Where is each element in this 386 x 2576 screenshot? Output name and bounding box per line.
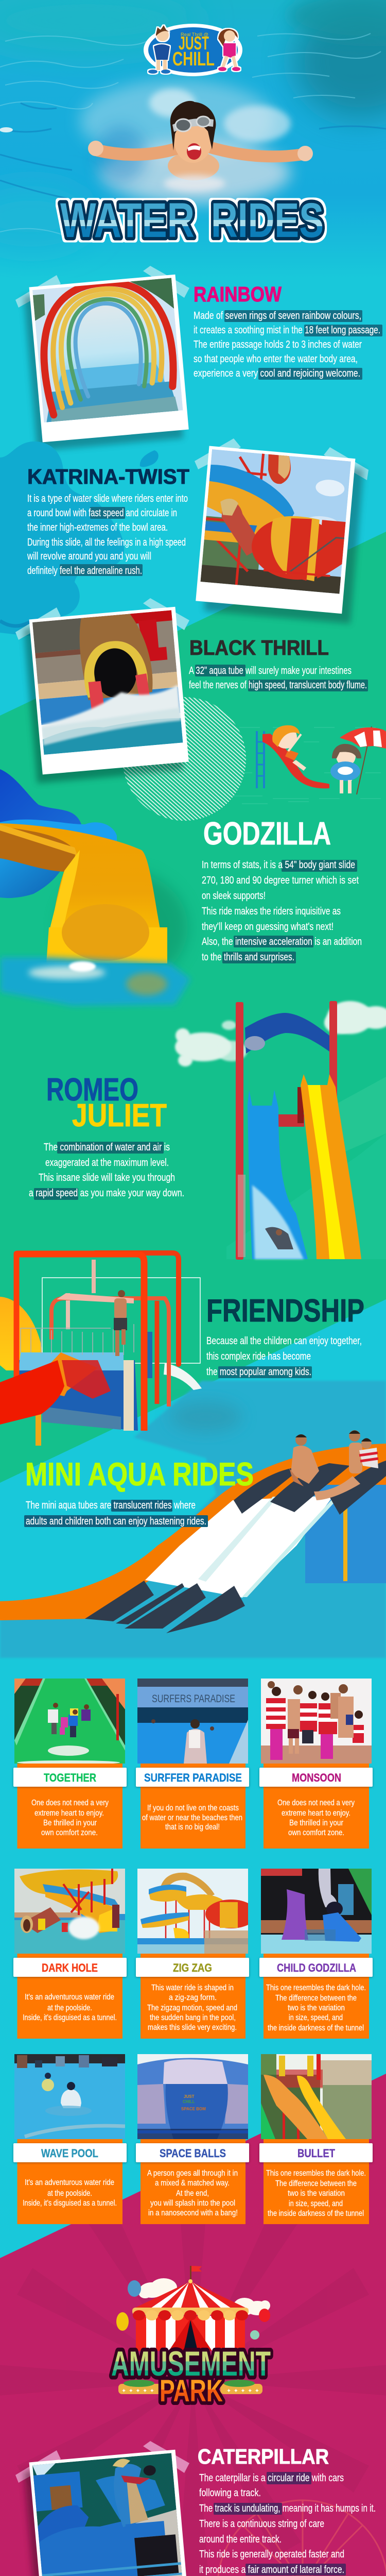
mini aqua rides text block xyxy=(24,1456,254,1527)
heading: black thrill: BLACK THRILL xyxy=(189,636,329,659)
balloons xyxy=(116,2280,270,2340)
card: together: One does not need a very xyxy=(31,1799,109,1807)
katrina twist text block: definitely feel the adrenaline rush. xyxy=(27,565,142,577)
katrina twist text block xyxy=(27,465,189,577)
caterpillar text block: There is a continuous string of care xyxy=(199,2518,324,2530)
tent flag xyxy=(190,2266,202,2281)
logo wordmark: Real Thrill @ xyxy=(181,32,208,37)
godzilla text block xyxy=(202,816,362,963)
card: child godzilla: CHILD GODZILLA xyxy=(277,1961,356,1974)
card: together: own comfort zone. xyxy=(41,1828,98,1837)
card: monsoon: Be thrilled in your xyxy=(289,1819,344,1827)
card: wave pool xyxy=(13,2054,127,2224)
card: child godzilla xyxy=(259,1869,373,2039)
card: space balls: SPACE BOM xyxy=(181,2107,206,2111)
katrina twist text block: a round bowl with fast speed and circulate in xyxy=(27,507,177,519)
card: space balls: in a nanosecond with a bang! xyxy=(148,2209,238,2217)
tent body xyxy=(136,2316,245,2351)
mini aqua rides text block: adults and children both can enjoy hastening rides. xyxy=(26,1516,206,1527)
caterpillar text block: following a track. xyxy=(199,2487,261,2499)
caterpillar text block: This ride is generally operated faster and xyxy=(199,2549,344,2560)
card: together: extreme heart to enjoy. xyxy=(34,1809,104,1818)
card: child godzilla: the inside darkness of the tunnel xyxy=(268,2024,364,2032)
polaroid: black thrill xyxy=(15,598,189,783)
katrina twist text block: will revolve around you and you will xyxy=(27,551,151,562)
romeo juliet text block xyxy=(29,1072,184,1200)
godzilla text block: This ride makes the riders inquisitive as xyxy=(202,906,341,917)
boy swimmer xyxy=(88,101,313,192)
card: monsoon xyxy=(259,1679,373,1849)
card: zig zag: ZIG ZAG xyxy=(173,1961,212,1974)
heading: katrina twist: KATRINA-TWIST xyxy=(27,465,189,488)
card: monsoon: extreme heart to enjoy. xyxy=(282,1809,350,1818)
hero pool photo xyxy=(0,0,386,278)
card: dark hole: DARK HOLE xyxy=(42,1961,98,1974)
card: dark hole: It's an adventurous water ride xyxy=(25,1993,114,2002)
card: child godzilla: two is the variation xyxy=(288,2004,345,2012)
black thrill text block xyxy=(189,636,368,691)
upper fins xyxy=(234,1461,386,1515)
friendship text block xyxy=(206,1293,364,1378)
card: together: Be thrilled in your xyxy=(43,1819,97,1827)
card: space balls xyxy=(136,2054,249,2224)
white slides xyxy=(145,1496,334,1598)
awning xyxy=(132,2308,249,2320)
card: dark hole: at the poolside. xyxy=(47,2004,92,2012)
caterpillar text block: The caterpillar is a circular ride with cars xyxy=(199,2472,344,2484)
splash blob behind Katrina text xyxy=(0,442,159,636)
card: surffer paradise: SURFFER PARADISE xyxy=(144,1771,242,1784)
romeo juliet text block: This insane slide will take you through xyxy=(39,1172,175,1183)
caterpillar text block xyxy=(198,2445,376,2575)
card: bullet: BULLET xyxy=(297,2147,335,2160)
friendship text block: this complex ride has become xyxy=(206,1351,311,1362)
illustration: kids on slide with umbrella xyxy=(232,725,386,804)
logo wordmark: JUST xyxy=(179,32,209,54)
card: monsoon: MONSOON xyxy=(292,1771,341,1784)
title: Water Rides xyxy=(60,193,324,248)
mascot boy xyxy=(148,25,170,74)
card: bullet: the inside darkness of the tunnel xyxy=(268,2209,364,2218)
mini aqua slide photo xyxy=(0,1430,386,1633)
romeo juliet text block: exaggerated at the maximum level. xyxy=(45,1157,169,1168)
card: zig zag xyxy=(136,1869,257,2039)
romeo juliet slides photo xyxy=(175,1001,386,1260)
card: dark hole xyxy=(13,1869,127,2039)
godzilla text block: they'll keep on guessing what's next! xyxy=(202,921,334,933)
red slide xyxy=(0,1352,111,1425)
card: surffer paradise: that is no big deal! xyxy=(165,1823,220,1832)
card: wave pool: at the poolside. xyxy=(47,2189,92,2198)
godzilla text block: on sleek supports! xyxy=(202,890,266,902)
polaroid: caterpillar xyxy=(15,2441,189,2576)
card: surffer paradise: of water or near the beaches then xyxy=(142,1814,242,1822)
card: monsoon: One does not need a very xyxy=(277,1799,355,1807)
card: surffer paradise: If you do not live on the coasts xyxy=(147,1804,239,1812)
lower fins xyxy=(85,1581,245,1633)
heading: caterpillar: CATERPILLAR xyxy=(198,2445,329,2468)
card: wave pool: WAVE POOL xyxy=(41,2147,98,2160)
card: space balls: CHILL xyxy=(183,2099,195,2104)
romeo juliet text block: The combination of water and air is xyxy=(44,1142,170,1153)
clouds xyxy=(139,2278,270,2315)
katrina twist text block: the inner high-extremes of the bowl area. xyxy=(27,522,168,533)
card: wave pool: Inside, it's disguised as a tunnel. xyxy=(23,2199,117,2208)
card: space balls: you will splash into the pool xyxy=(150,2199,235,2208)
amusement park logo xyxy=(111,2266,271,2408)
caterpillar text block: it produces a fair amount of lateral force. xyxy=(199,2564,344,2575)
side banners: ✦✦✦✦✦ xyxy=(226,2387,259,2394)
wordmark: amusement: AMUSEMENT xyxy=(111,2344,271,2383)
heading: juliet: JULIET xyxy=(72,1098,167,1133)
heading: godzilla: GODZILLA xyxy=(203,816,331,852)
polaroid: rainbow xyxy=(15,266,189,451)
card: zig zag: a zig-zag form. xyxy=(169,1993,217,2002)
rainbow text block xyxy=(194,282,382,380)
katrina twist text block: During this slide, all the feelings in a high speed xyxy=(27,537,186,548)
card: space balls: a mixed & matched way. xyxy=(155,2179,230,2188)
wordmark: park: PARK xyxy=(160,2374,223,2408)
person xyxy=(114,1290,127,1356)
red slide xyxy=(262,734,329,788)
mini aqua rides text block: The mini aqua tubes are translucent rides where xyxy=(26,1500,196,1511)
side banners: ✦✦✦✦✦ xyxy=(121,2387,154,2394)
side banners xyxy=(118,2380,262,2394)
clouds xyxy=(175,1001,386,1066)
card: child godzilla: The difference between the xyxy=(275,1994,357,2003)
umbrella xyxy=(340,726,386,794)
girl on slide xyxy=(272,725,306,771)
friendship text block: the most popular among kids. xyxy=(206,1366,311,1378)
card: child godzilla: in size, speed, and xyxy=(289,2013,343,2022)
card: monsoon: own comfort zone. xyxy=(288,1828,344,1837)
godzilla slide photo xyxy=(0,769,190,1006)
card: bullet: The difference between the xyxy=(275,2179,357,2188)
title: Water Rides: WATER xyxy=(60,193,195,248)
child with float xyxy=(330,744,361,793)
card: wave pool: It's an adventurous water ride xyxy=(25,2178,114,2187)
friendship slide photo xyxy=(0,1253,202,1446)
godzilla text block: to the thrills and surprises. xyxy=(202,952,294,963)
heading: rainbow: RAINBOW xyxy=(194,282,282,306)
card: bullet: in size, speed, and xyxy=(289,2199,343,2208)
faint ferris wheel xyxy=(218,2500,386,2576)
card: space balls: A person goes all through it in xyxy=(147,2169,238,2178)
card: zig zag: makes this slide very exciting. xyxy=(148,2023,237,2032)
heading: mini aqua rides: MINI AQUA RIDES xyxy=(25,1456,254,1493)
ladder xyxy=(257,731,264,788)
title: Water Rides: RIDES xyxy=(211,193,324,248)
caterpillar text block: around the entire track. xyxy=(199,2534,282,2545)
card: zig zag: The zigzag motion, speed and xyxy=(147,2004,237,2012)
card: zig zag: This water ride is shaped in xyxy=(151,1984,234,1992)
romeo juliet text block: a rapid speed as you make your way down. xyxy=(29,1188,184,1199)
friendship water and yellow circle xyxy=(0,1297,386,1658)
card: space balls: At the end, xyxy=(176,2189,209,2198)
card: together xyxy=(13,1679,127,1849)
card: space balls: JUST xyxy=(184,2094,195,2099)
card: zig zag: the sudden bang in the pool, xyxy=(150,2013,236,2022)
card: bullet: two is the variation xyxy=(288,2189,345,2198)
mascot girl xyxy=(218,29,240,71)
kids xyxy=(289,1430,378,1500)
polaroid: katrina twist xyxy=(195,438,369,624)
card: together: TOGETHER xyxy=(44,1771,96,1784)
tent roof xyxy=(132,2279,249,2309)
logo wordmark: CHILL xyxy=(172,48,215,70)
hatched circle xyxy=(122,697,246,821)
katrina twist text block: It is a type of water slide where riders enter into xyxy=(27,493,188,504)
white frame xyxy=(42,1278,200,1363)
water at slide foot xyxy=(0,957,190,1006)
card: dark hole: Inside, it's disguised as a tunnel. xyxy=(23,2013,117,2022)
heading: romeo: ROMEO xyxy=(46,1072,138,1108)
card: bullet xyxy=(259,2054,373,2224)
card: surffer paradise xyxy=(136,1679,249,1849)
card: space balls: SPACE BALLS xyxy=(160,2147,226,2160)
platform xyxy=(17,1324,152,1431)
logo: Just Chill xyxy=(144,24,242,76)
logo wordmark xyxy=(172,32,215,70)
water splash around boy xyxy=(80,80,291,204)
